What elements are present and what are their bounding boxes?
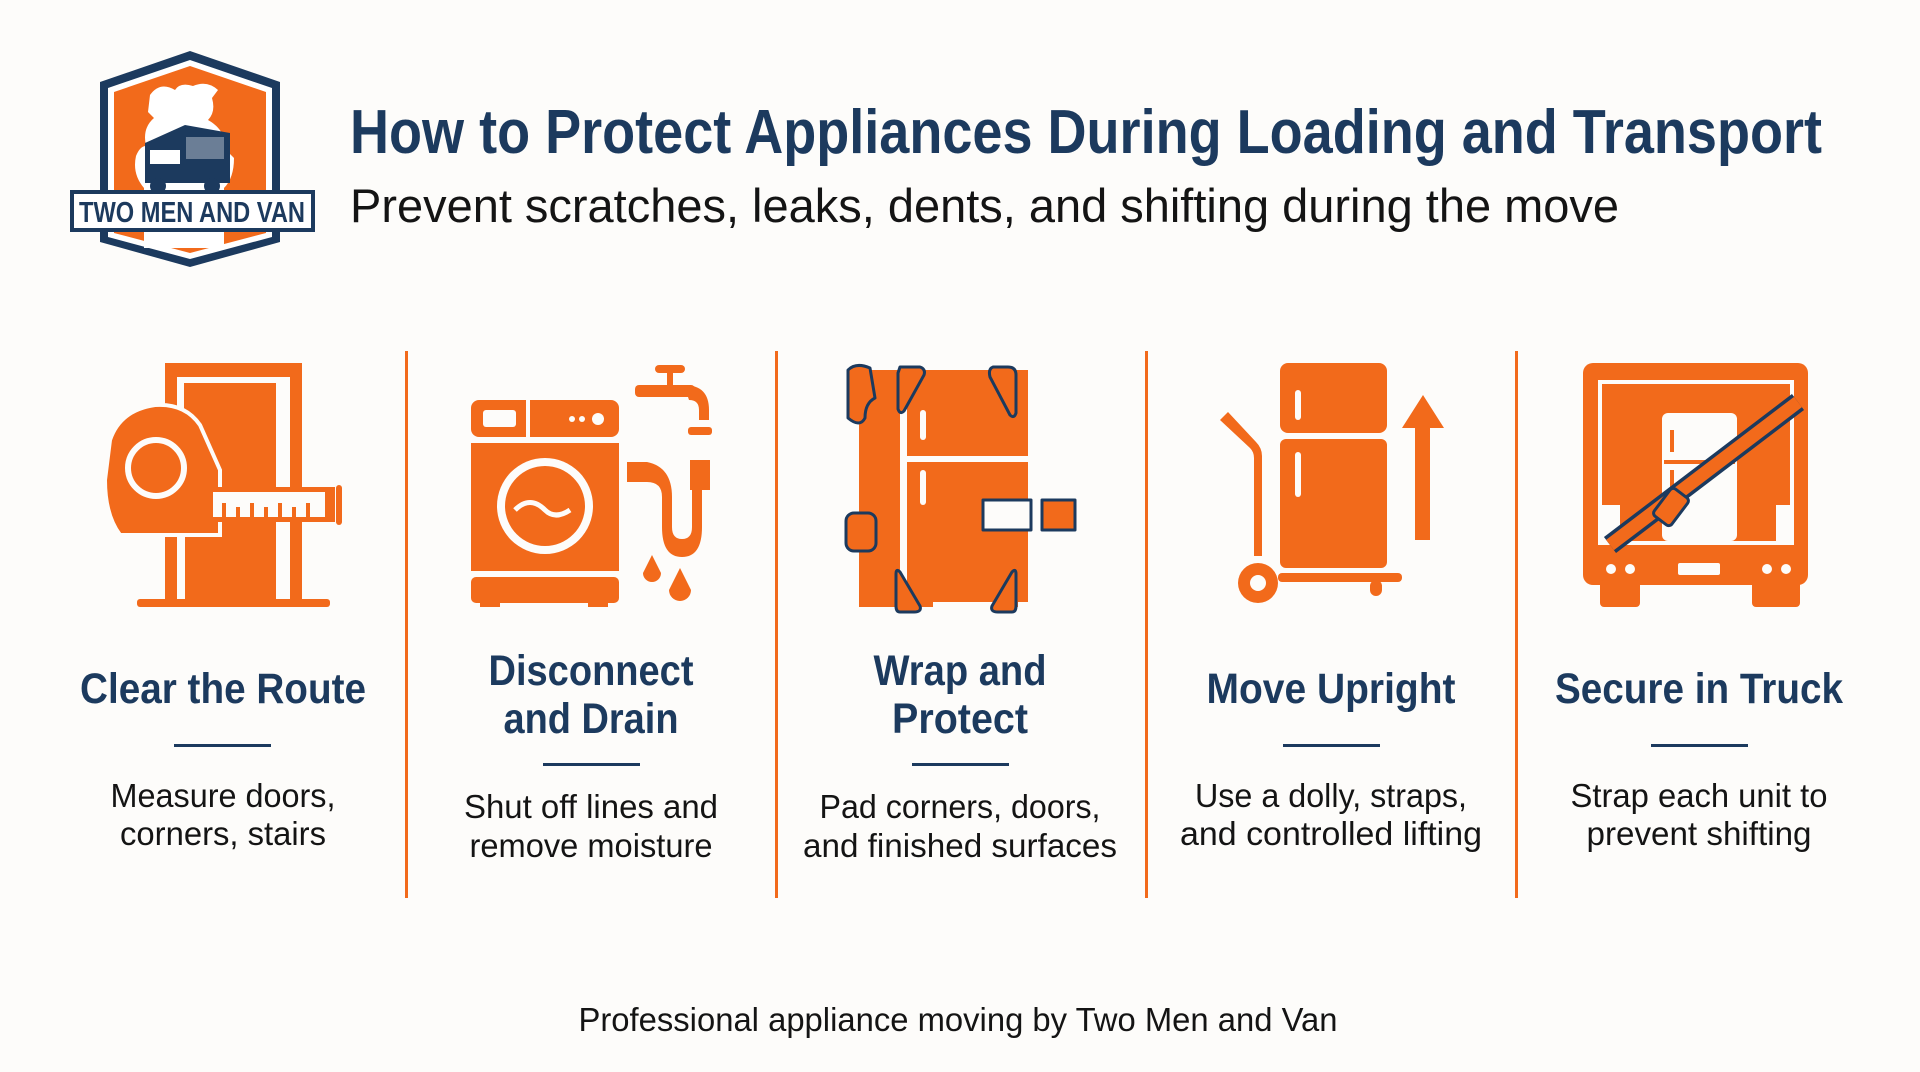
subtitle: Prevent scratches, leaks, dents, and shifting during the move bbox=[350, 179, 1619, 232]
column 3 text: Protect bbox=[892, 695, 1028, 743]
column 1 text: Clear the Route bbox=[80, 665, 366, 713]
column 5 text: Secure in Truck bbox=[1555, 665, 1843, 713]
column 1 text bbox=[80, 665, 366, 852]
column 4 text: Move Upright bbox=[1206, 665, 1456, 713]
footer: Professional appliance moving by Two Men and Van bbox=[578, 1001, 1338, 1038]
logo: TWO MEN AND VAN bbox=[79, 197, 305, 229]
column 2 text: Disconnect bbox=[488, 647, 694, 695]
column 3 text: and finished surfaces bbox=[803, 827, 1117, 864]
icon: dolly with fridge and arrow bbox=[1220, 363, 1444, 603]
column 2 text: remove moisture bbox=[470, 827, 712, 864]
column 1 text: corners, stairs bbox=[120, 815, 326, 852]
column 1 text: Measure doors, bbox=[110, 777, 336, 814]
column 3 text: Pad corners, doors, bbox=[820, 788, 1100, 825]
logo bbox=[70, 51, 315, 267]
column 2 text: and Drain bbox=[504, 695, 678, 743]
column 4 text: Use a dolly, straps, bbox=[1195, 777, 1467, 814]
column 5 text: prevent shifting bbox=[1586, 815, 1812, 852]
column 5 text: Strap each unit to bbox=[1570, 777, 1828, 814]
column 3 text: Wrap and bbox=[874, 647, 1046, 695]
icon: door and tape measure bbox=[105, 363, 342, 607]
column 2 text bbox=[464, 647, 718, 864]
column 5 text bbox=[1555, 665, 1843, 852]
column 4 text bbox=[1180, 665, 1482, 852]
column 2 text: Shut off lines and bbox=[464, 788, 718, 825]
icon: washer with faucet and drain bbox=[471, 365, 712, 607]
column 3 text bbox=[803, 647, 1117, 864]
icon: truck with strapped fridge bbox=[1583, 363, 1808, 607]
column 4 text: and controlled lifting bbox=[1180, 815, 1482, 852]
icon: fridge with corner protectors bbox=[846, 365, 1075, 612]
